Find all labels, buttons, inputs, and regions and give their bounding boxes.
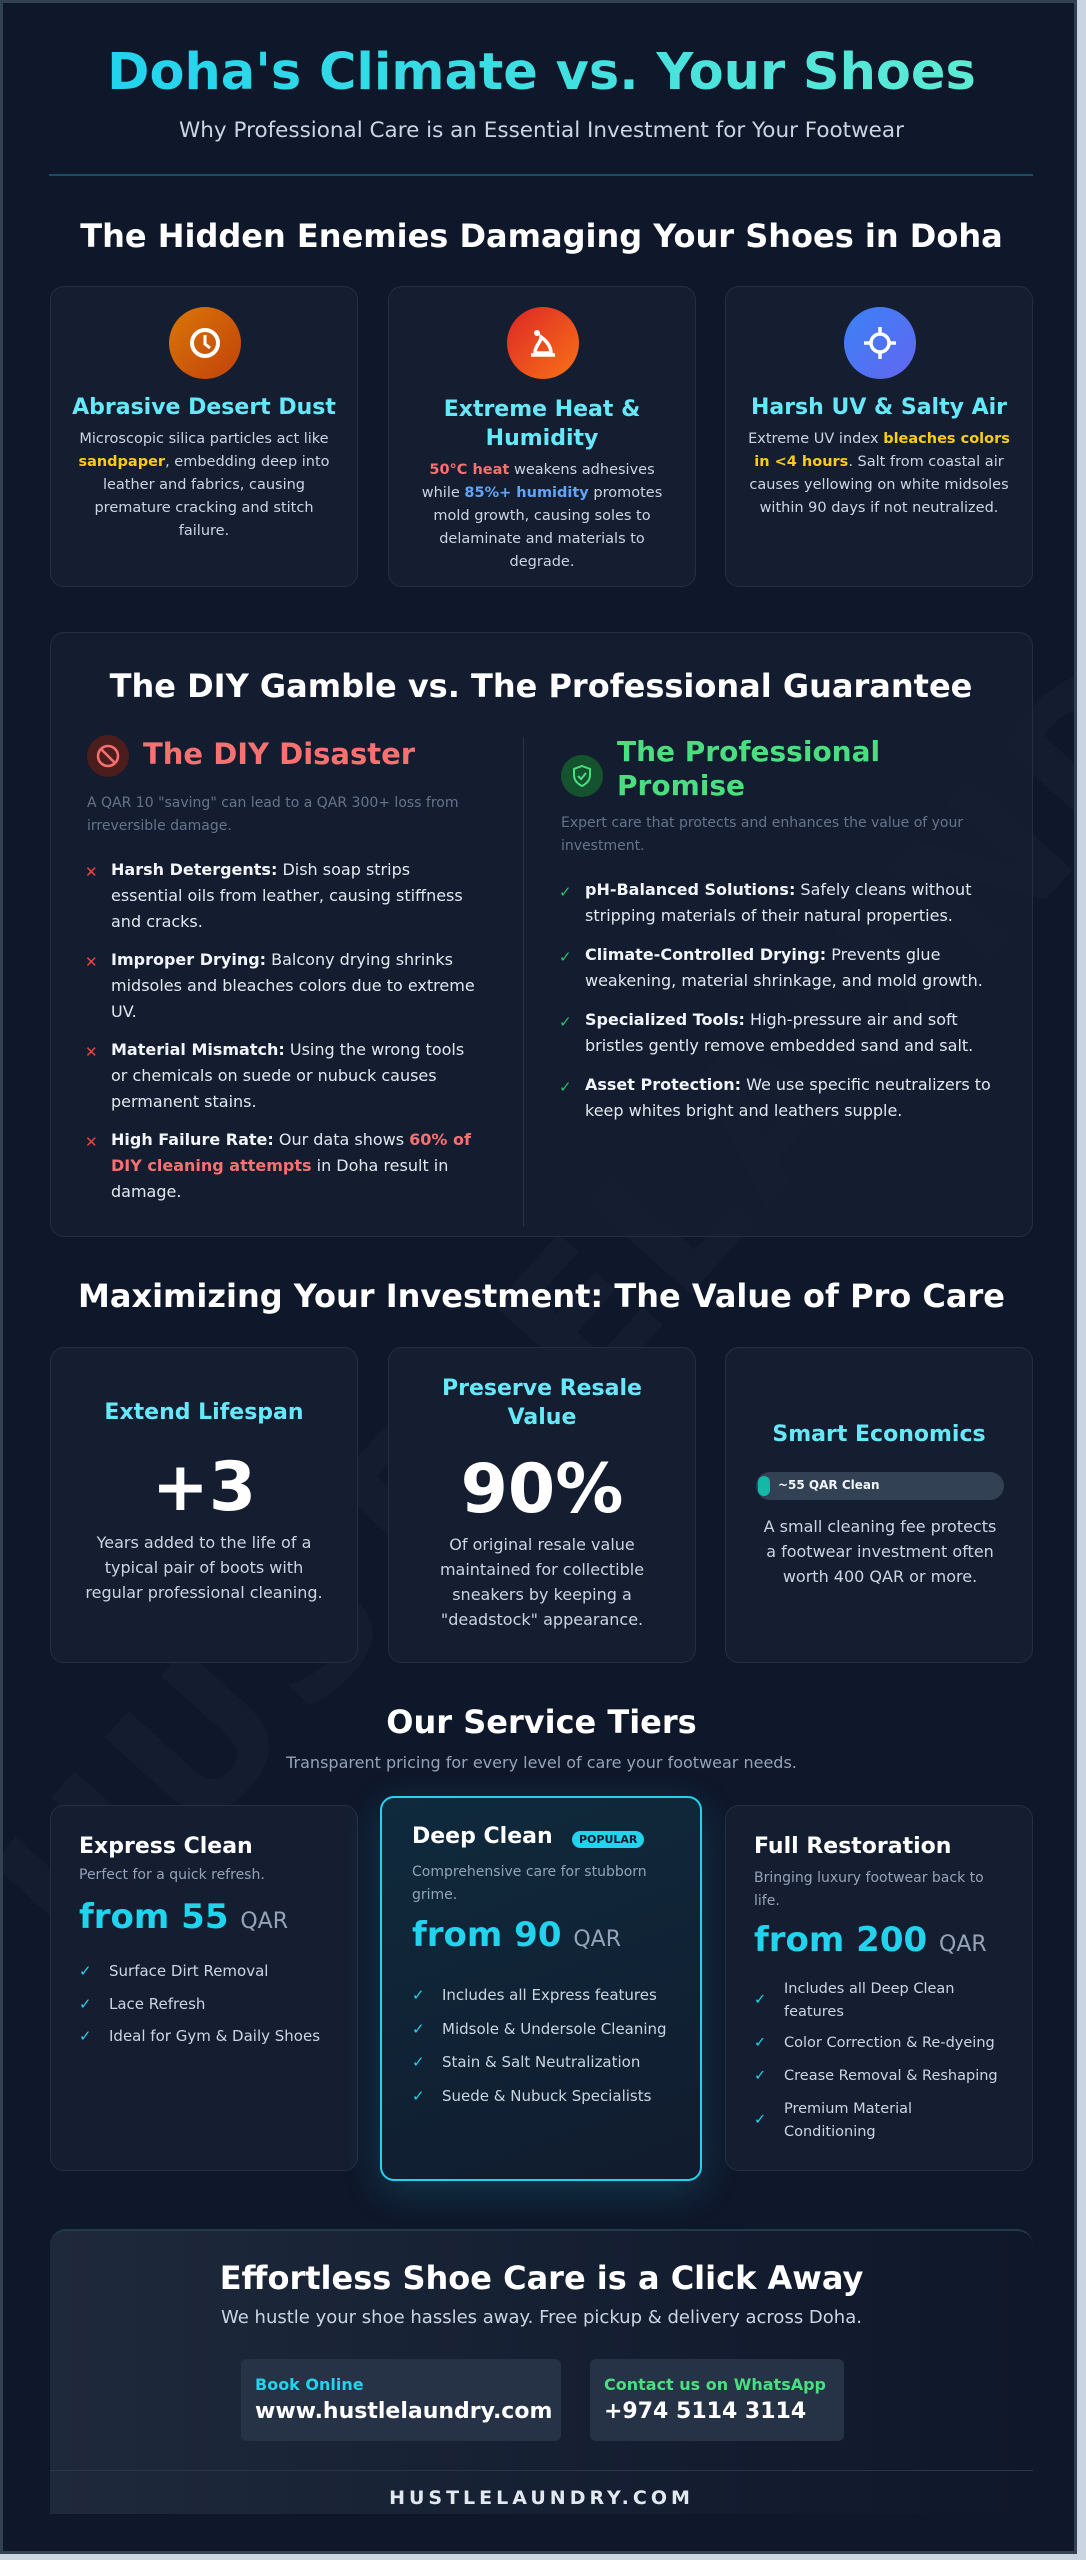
tier: express: Perfect for a quick refresh. (79, 1867, 265, 1883)
tier: deep (popular): Deep Clean (412, 1824, 553, 1849)
Pro column: Asset Protection: We use specific neutralizers to keep whites bright and leathers supple. (585, 1075, 991, 1120)
heading: The DIY Gamble vs. The Professional Guarantee (110, 667, 972, 705)
tier: full restoration: from 200 QAR (754, 1920, 987, 1960)
card: resale: Of original resale value maintained for collectible sneakers by keeping a "deadstock" appearance. (440, 1535, 644, 1629)
badge (572, 1831, 644, 1848)
button: whatsapp: Contact us on WhatsApp (604, 2375, 826, 2394)
tier: deep (popular): Suede & Nubuck Specialists (442, 2087, 651, 2105)
Pro column: Climate-Controlled Drying: Prevents glue weakening, material shrinkage, and mold growth. (585, 945, 983, 990)
icon: dust (169, 307, 241, 379)
Pro column: Specialized Tools: High-pressure air and soft bristles gently remove embedded sand and salt. (585, 1010, 973, 1055)
button: book online (241, 2359, 561, 2441)
DIY column: ✕ (85, 1043, 98, 1061)
card: uv (725, 286, 1033, 587)
tier: deep (popular): from 90 QAR (412, 1915, 621, 1955)
tier: deep (popular): Stain & Salt Neutralization (442, 2053, 640, 2071)
DIY column: Harsh Detergents: Dish soap strips essential oils from leather, causing stiffness and cracks. (111, 860, 463, 931)
button: whatsapp (590, 2359, 844, 2441)
tier: express: Express Clean (79, 1834, 253, 1859)
icon: heat (507, 307, 579, 379)
button: whatsapp: +974 5114 3114 (604, 2399, 806, 2424)
card: lifespan: Years added to the life of a typical pair of boots with regular professional cleaning. (85, 1533, 323, 1602)
card: lifespan: Extend Lifespan (104, 1400, 304, 1425)
icon: shield (561, 755, 603, 797)
tier: full restoration: ✓ (754, 2112, 766, 2128)
progress bar: ~55 QAR Clean (778, 1478, 880, 1492)
Pro column: ✓ (559, 883, 572, 901)
tier: full restoration: ✓ (754, 2068, 766, 2084)
card: desert dust: Abrasive Desert Dust (72, 395, 336, 420)
Pro column (559, 735, 991, 1120)
Pro column: The Professional (617, 735, 880, 768)
DIY column: ✕ (85, 863, 98, 881)
card: economics: A small cleaning fee protects a footwear investment often worth 400 QAR or more. (764, 1517, 996, 1586)
card: lifespan: +3 (152, 1448, 256, 1527)
card: uv: Extreme UV index bleaches colors in <4 hours. Salt from coastal air causes yellowing on white midsoles within 90 days if not neutralized. (748, 431, 1010, 516)
button: book online: www.hustlelaundry.com (255, 2399, 552, 2424)
tier: express: ✓ (79, 1962, 92, 1980)
card: resale: 90% (461, 1450, 623, 1529)
card: heat: Extreme Heat & Humidity (444, 397, 640, 451)
icon: ban (87, 735, 129, 777)
tier: deep (popular): ✓ (412, 2020, 425, 2038)
heading: service tiers: Our Service Tiers (386, 1703, 697, 1741)
card: desert dust: Microscopic silica particles act like sandpaper, embedding deep into leather and fabrics, causing premature cracking and stitch failure. (78, 431, 330, 539)
tier: full restoration: Premium Material Conditioning (784, 2101, 912, 2140)
card: desert dust (50, 286, 358, 587)
button: book online: Book Online (255, 2375, 364, 2394)
CTA panel (50, 2229, 1033, 2514)
card: economics (725, 1347, 1033, 1663)
progress bar (756, 1472, 1004, 1500)
heading: hidden enemies: The Hidden Enemies Damaging Your Shoes in Doha (80, 217, 1003, 255)
tier: full restoration: ✓ (754, 1992, 766, 2008)
tier: express: Surface Dirt Removal (109, 1962, 268, 1980)
tier: express: ✓ (79, 2027, 92, 2045)
heading: investment: Maximizing Your Investment: The Value of Pro Care (78, 1277, 1005, 1315)
tier: express: ✓ (79, 1995, 92, 2013)
tier: deep (popular): ✓ (412, 2087, 425, 2105)
subtitle: Why Professional Care is an Essential Investment for Your Footwear (179, 118, 904, 143)
tier: express: Lace Refresh (109, 1995, 205, 2013)
CTA panel: We hustle your shoe hassles away. Free pickup & delivery across Doha. (221, 2307, 862, 2328)
tier: deep (popular): Midsole & Undersole Cleaning (442, 2020, 667, 2038)
card: resale (388, 1347, 696, 1663)
DIY column: Improper Drying: Balcony drying shrinks midsoles and bleaches colors due to extreme UV. (111, 950, 475, 1021)
tier: full restoration (725, 1805, 1033, 2171)
tier: deep (popular): ✓ (412, 1986, 425, 2004)
Pro column: pH-Balanced Solutions: Safely cleans without stripping materials of their natural properties. (585, 880, 971, 925)
Pro column: Expert care that protects and enhances the value of your investment. (561, 815, 963, 854)
icon: uv (844, 307, 916, 379)
DIY column: A QAR 10 "saving" can lead to a QAR 300+ loss from irreversible damage. (87, 795, 459, 834)
tier: deep (popular): Comprehensive care for stubborn grime. (412, 1864, 647, 1903)
DIY column: ✕ (85, 953, 98, 971)
DIY column: ✕ (85, 1133, 98, 1151)
DIY column: Material Mismatch: Using the wrong tools or chemicals on suede or nubuck causes permanent stains. (111, 1040, 464, 1111)
tier: full restoration: Color Correction & Re-dyeing (784, 2035, 995, 2051)
card: economics: Smart Economics (772, 1422, 986, 1447)
Pro column: ✓ (559, 948, 572, 966)
DIY column: The DIY Disaster (143, 737, 415, 771)
tier: express: from 55 QAR (79, 1897, 288, 1937)
footer: HUSTLELAUNDRY.COM (389, 2487, 694, 2509)
tier: deep (popular) (380, 1796, 702, 2181)
DIY column: High Failure Rate: Our data shows 60% of DIY cleaning attempts in Doha result in damage. (111, 1130, 471, 1201)
CTA panel: Effortless Shoe Care is a Click Away (220, 2259, 863, 2297)
Pro column: ✓ (559, 1078, 572, 1096)
Pro column: Promise (617, 769, 745, 802)
card: heat (388, 286, 696, 587)
tier: full restoration: Full Restoration (754, 1834, 951, 1859)
Pro column: ✓ (559, 1013, 572, 1031)
tier: full restoration: Bringing luxury footwear back to life. (754, 1870, 984, 1909)
tier: full restoration: ✓ (754, 2035, 766, 2051)
badge: POPULAR (579, 1833, 637, 1846)
card: resale: Preserve Resale Value (442, 1376, 642, 1430)
panel: DIY vs Professional (50, 632, 1033, 1237)
tier: full restoration: Crease Removal & Reshaping (784, 2068, 998, 2084)
card: heat: 50°C heat weakens adhesives while 85%+ humidity promotes mold growth, causing soles to delaminate and materials to degrade. (422, 462, 662, 570)
tier: express: Ideal for Gym & Daily Shoes (109, 2027, 320, 2045)
DIY column (85, 735, 475, 1201)
text: Transparent pricing for every level of care your footwear needs. (286, 1753, 797, 1772)
card: uv: Harsh UV & Salty Air (751, 395, 1007, 420)
tier: deep (popular): Includes all Express features (442, 1986, 657, 2004)
tier: express (50, 1805, 358, 2171)
card: lifespan (50, 1347, 358, 1663)
tier: full restoration: Includes all Deep Clean features (784, 1981, 954, 2020)
tier: deep (popular): ✓ (412, 2053, 425, 2071)
title: Doha's Climate vs. Your Shoes (107, 43, 976, 102)
